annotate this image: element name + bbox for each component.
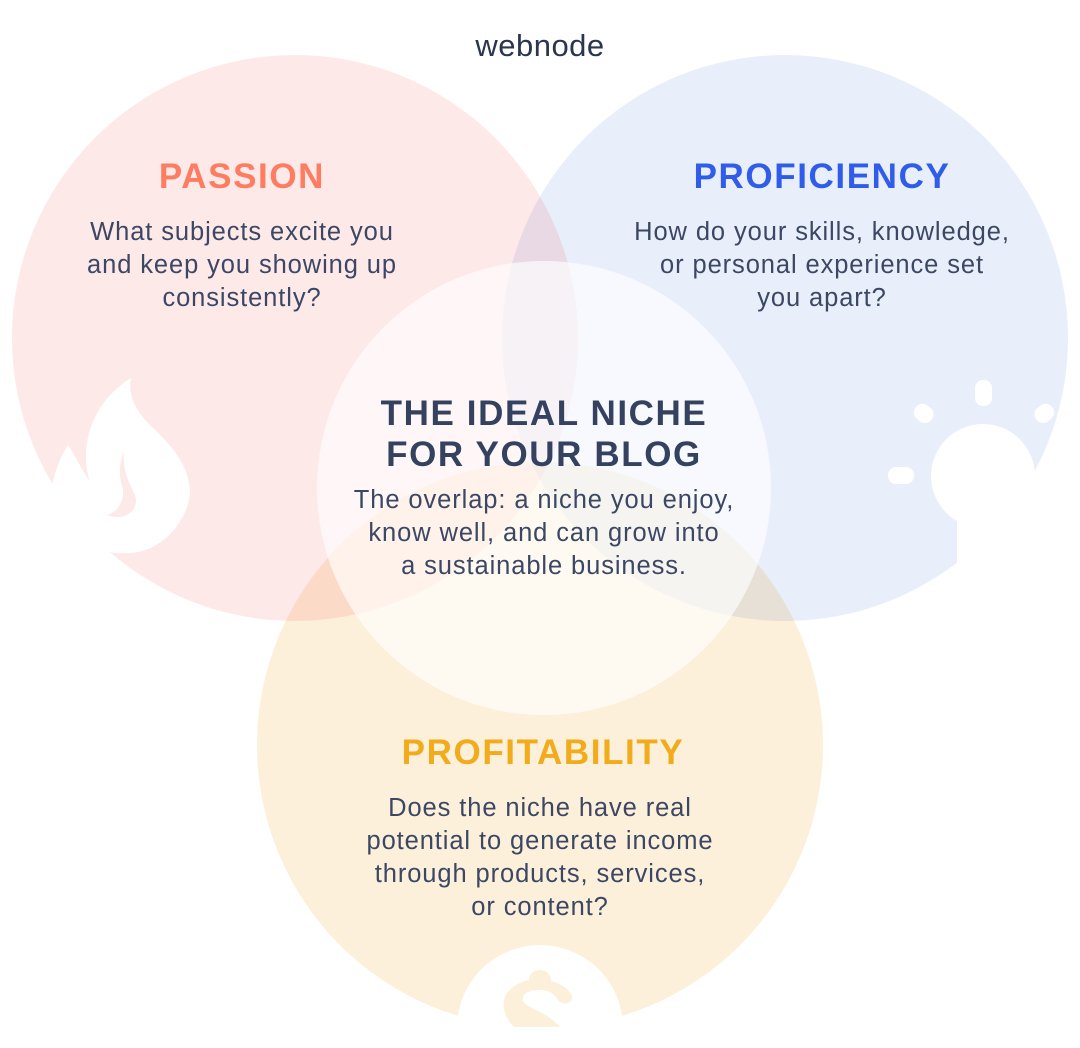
text: passion: consistently? <box>162 284 322 312</box>
icon: dollar <box>457 945 623 1048</box>
text: profitability: or content? <box>471 893 609 921</box>
heading: proficiency: PROFICIENCY <box>694 157 950 196</box>
logo: webnode <box>475 28 605 63</box>
heading: ideal niche <box>381 394 707 474</box>
text: profitability: potential to generate income <box>366 827 714 855</box>
text: ideal niche <box>354 486 734 580</box>
text: profitability: through products, services, <box>375 860 705 888</box>
text: passion: What subjects excite you <box>90 218 394 246</box>
text: profitability <box>366 794 714 921</box>
text: ideal niche: The overlap: a niche you enjoy, <box>354 486 734 514</box>
heading: passion: PASSION <box>159 157 325 196</box>
text: passion: and keep you showing up <box>87 251 397 279</box>
heading: ideal niche: THE IDEAL NICHE <box>381 394 707 433</box>
text: proficiency: or personal experience set <box>660 251 984 279</box>
circle: passion <box>12 55 578 621</box>
text: proficiency <box>634 218 1010 312</box>
text: ideal niche: a sustainable business. <box>401 552 687 580</box>
heading: ideal niche: FOR YOUR BLOG <box>386 435 702 474</box>
circle: profitability <box>257 462 823 1028</box>
text: profitability: Does the niche have real <box>388 794 692 822</box>
circle: proficiency <box>502 55 1068 621</box>
text: proficiency: you apart? <box>757 284 887 312</box>
text: ideal niche: know well, and can grow into <box>368 519 720 547</box>
icon: sun <box>888 380 1067 570</box>
icon: flame <box>50 378 190 553</box>
text: proficiency: How do your skills, knowledge, <box>634 218 1010 246</box>
circle: ideal niche <box>317 261 771 715</box>
text: passion <box>87 218 397 312</box>
heading: profitability: PROFITABILITY <box>402 733 684 772</box>
